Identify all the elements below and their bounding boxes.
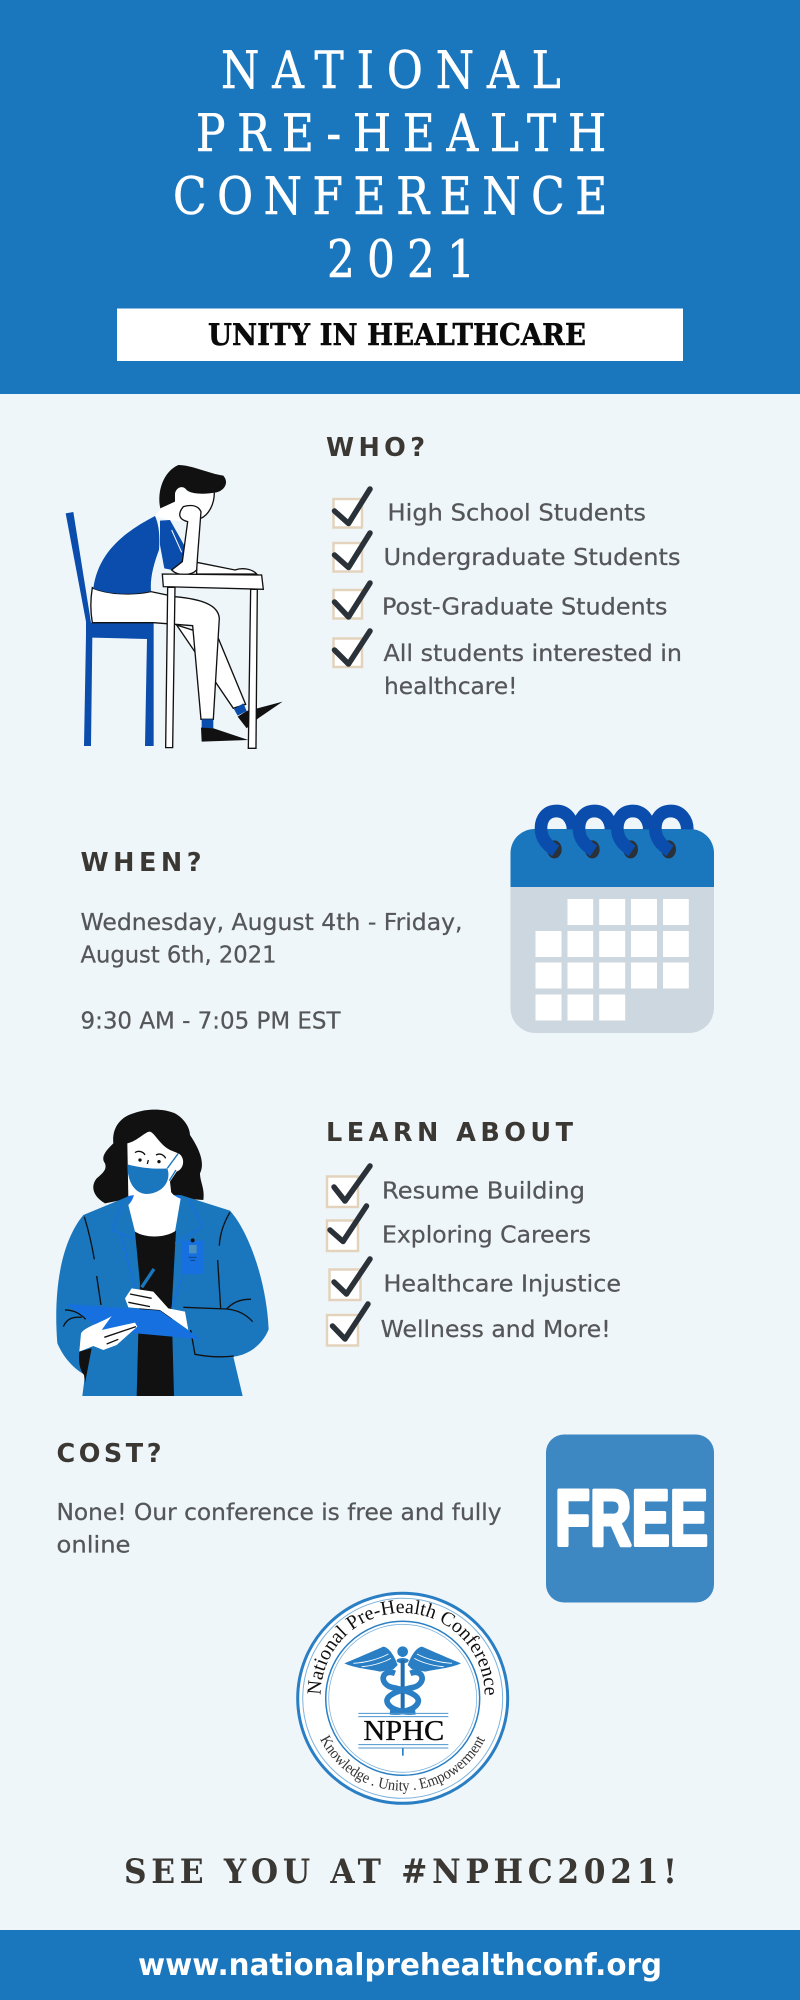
- item: wellness and more: [327, 1304, 611, 1346]
- cost text block: None! Our conference is free and fully: [56, 1500, 502, 1526]
- item: resume building: Resume Building: [382, 1179, 585, 1205]
- sleeve: [160, 520, 185, 570]
- chair: [66, 512, 154, 746]
- shirt: [93, 516, 159, 594]
- desk legs: [166, 587, 257, 748]
- seal rings: [298, 1593, 508, 1803]
- clipboard: [67, 1304, 201, 1339]
- when text block: [80, 910, 463, 1035]
- back shoe: [238, 702, 283, 728]
- coat seams: [63, 1212, 253, 1357]
- pen: [142, 1269, 154, 1287]
- item: exploring careers: Exploring Careers: [382, 1223, 591, 1249]
- calendar body: [510, 886, 714, 1033]
- item: resume building: [327, 1166, 585, 1207]
- date grid: [536, 899, 689, 1020]
- icon: calendar: [510, 811, 714, 1033]
- item: healthcare injustice: Healthcare Injustice: [384, 1272, 621, 1298]
- caduceus: [344, 1646, 461, 1756]
- wings: [344, 1647, 398, 1672]
- title: [173, 42, 607, 290]
- title: 2021: [327, 231, 475, 290]
- closing tagline: SEE YOU AT #NPHC2021!: [124, 1851, 677, 1891]
- upper hand: [125, 1288, 188, 1330]
- front sock: [202, 719, 213, 728]
- header panel: [0, 0, 800, 394]
- face: [127, 1132, 183, 1197]
- item: healthcare injustice: [330, 1259, 621, 1300]
- seal top text: National Pre-Health Conference: [307, 1600, 494, 1695]
- hair: [93, 1110, 204, 1203]
- title: CONFERENCE: [173, 168, 607, 227]
- item: all students: healthcare!: [384, 674, 518, 700]
- snakes: [383, 1672, 422, 1712]
- heading: when: WHEN?: [80, 848, 202, 878]
- item: high school students: [334, 489, 646, 528]
- lower hand: [79, 1316, 137, 1352]
- website url: www.nationalprehealthconf.org: [138, 1948, 662, 1983]
- item: post-graduate students: Post-Graduate Students: [382, 594, 668, 620]
- icon: free badge: [546, 1434, 714, 1602]
- face and neck: [155, 487, 214, 522]
- item: post-graduate students: [334, 583, 668, 620]
- when text block: Wednesday, August 4th - Friday,: [80, 910, 463, 936]
- footer panel: [0, 1930, 800, 2000]
- collar lines: [112, 1198, 202, 1308]
- cost text block: [56, 1500, 502, 1559]
- item: all students: [334, 631, 682, 700]
- logo: NPHC seal: [296, 1592, 510, 1805]
- id badge: [182, 1238, 203, 1274]
- inner collar: [127, 1195, 182, 1206]
- NPHC wordmark: NPHC: [363, 1715, 444, 1747]
- illustration: masked woman with clipboard: [56, 1110, 269, 1396]
- back sock: [234, 703, 247, 716]
- title: NATIONAL: [221, 42, 561, 101]
- illustration: student sitting at desk: [66, 465, 283, 748]
- trousers: [91, 588, 219, 719]
- back leg: [177, 625, 246, 708]
- neck: [128, 1191, 181, 1237]
- title: PRE-HEALTH: [196, 105, 606, 164]
- heading: cost: COST?: [56, 1439, 162, 1469]
- item: wellness and more: Wellness and More!: [381, 1317, 611, 1343]
- binder rings and holes: [541, 811, 687, 858]
- heading: learn about: LEARN ABOUT: [326, 1118, 574, 1148]
- coat: [56, 1195, 269, 1396]
- far arm on desk: [197, 562, 257, 574]
- black shirt: [135, 1231, 176, 1396]
- calendar header: [510, 829, 714, 887]
- when text block: August 6th, 2021: [80, 943, 276, 969]
- subtitle banner: [117, 308, 683, 361]
- who checklist: [334, 489, 682, 700]
- item: all students: All students interested in: [384, 641, 682, 667]
- item: undergraduate students: [334, 533, 680, 572]
- desk top: [162, 574, 263, 589]
- when text block: 9:30 AM - 7:05 PM EST: [80, 1009, 341, 1035]
- learn about checklist: [327, 1166, 621, 1346]
- mask strap: [167, 1153, 178, 1181]
- icon: free badge: FREE: [555, 1473, 708, 1562]
- staff: [397, 1646, 408, 1657]
- cuff shadow: [79, 1348, 92, 1383]
- seal bottom text: Knowledge . Unity . Empowerment: [320, 1734, 485, 1794]
- item: undergraduate students: Undergraduate Students: [384, 545, 680, 571]
- hair: [159, 465, 226, 508]
- eyes and brows: [135, 1151, 166, 1164]
- front shoe: [201, 728, 248, 742]
- item: exploring careers: [327, 1206, 591, 1251]
- rules: [358, 1713, 448, 1748]
- item: high school students: High School Students: [388, 501, 646, 527]
- subtitle banner: UNITY IN HEALTHCARE: [208, 318, 586, 353]
- mask: [127, 1164, 168, 1194]
- forearm and fist: [172, 506, 201, 575]
- heading: who: WHO?: [326, 433, 425, 463]
- cost text block: online: [56, 1533, 130, 1559]
